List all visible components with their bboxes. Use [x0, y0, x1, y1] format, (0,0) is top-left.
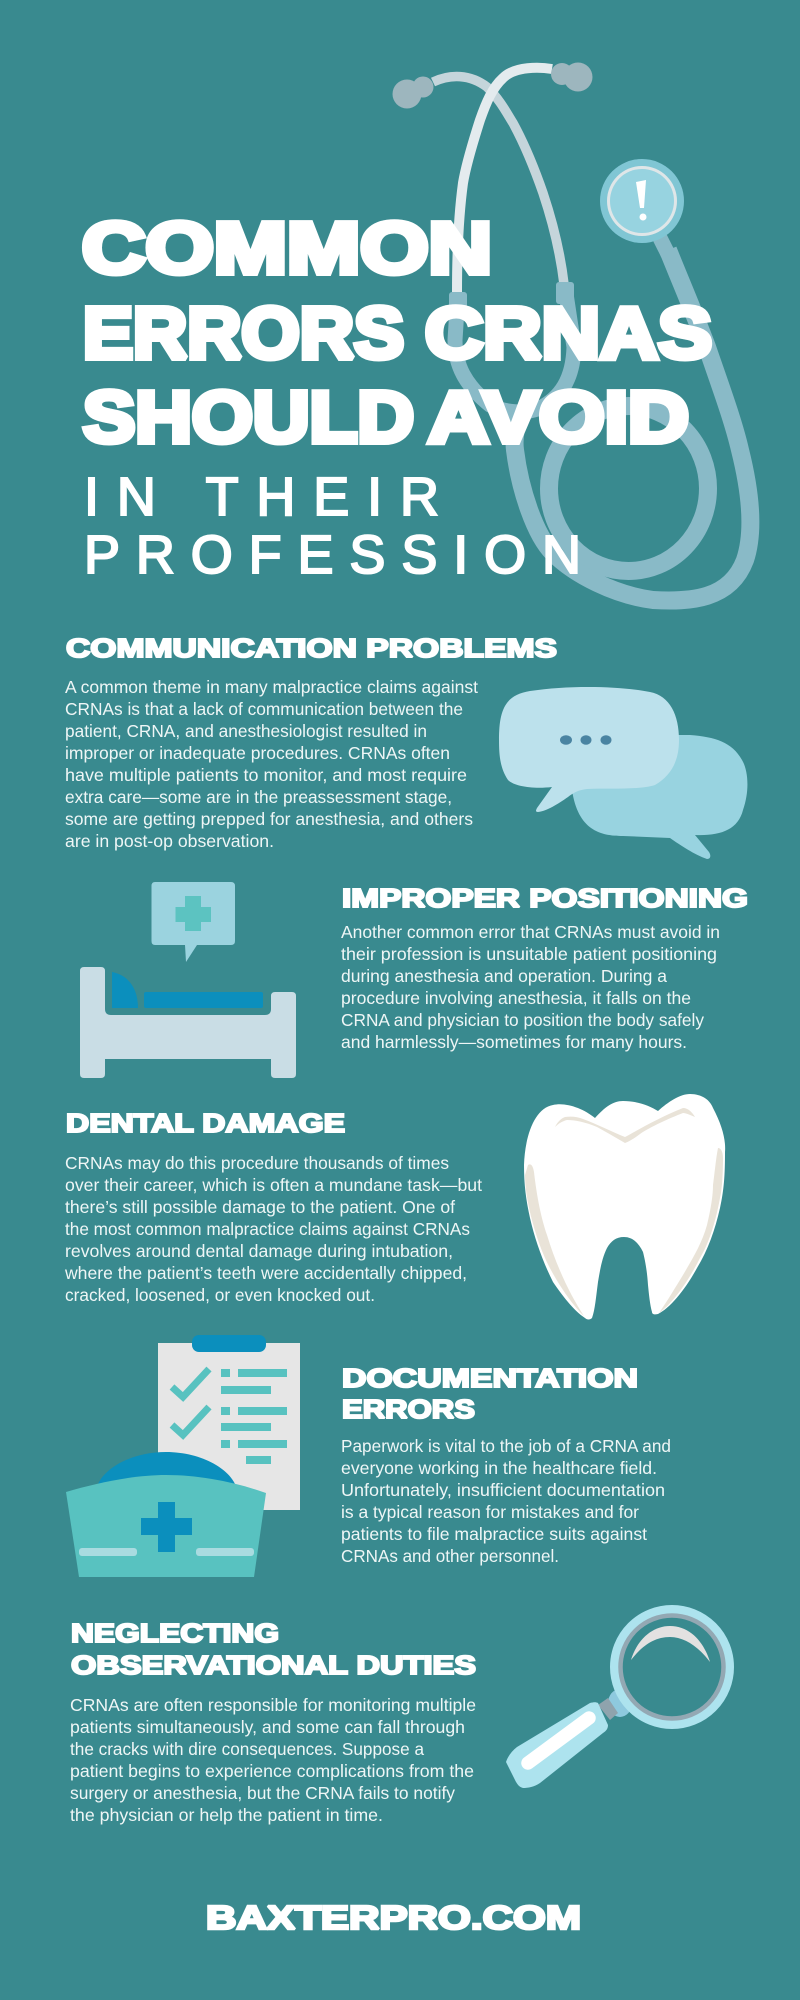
text block: improper or inadequate procedures. CRNAs often [65, 743, 450, 763]
text block: over their career, which is often a mundane task—but [65, 1175, 482, 1195]
title: COMMON [82, 209, 492, 289]
title: AVOID [428, 378, 689, 458]
text block: is a typical reason for mistakes and for [341, 1502, 639, 1522]
heading: DOCUMENTATION [342, 1363, 638, 1393]
text block: cracked, loosened, or even knocked out. [65, 1285, 375, 1305]
heading: NEGLECTING [71, 1618, 279, 1648]
text block: CRNAs are often responsible for monitoring multiple [70, 1695, 476, 1715]
text block: are in post-op observation. [65, 831, 274, 851]
text block: A common theme in many malpractice claims against [65, 677, 478, 697]
panel: neglecting observational duties [70, 1610, 730, 1825]
panel: documentation errors [66, 1335, 671, 1577]
title: SHOULD [83, 378, 414, 458]
subtitle [84, 467, 581, 585]
icon: hospital bed with medical speech bubble [80, 882, 296, 1078]
icon: magnifying glass [506, 1610, 730, 1788]
heading: IMPROPER POSITIONING [342, 883, 748, 913]
text block: everyone working in the healthcare field. [341, 1458, 657, 1478]
text block: CRNA and physician to position the body safely [341, 1010, 704, 1030]
text block: patients to file malpractice suits against [341, 1524, 647, 1544]
panel: improper positioning [80, 882, 748, 1078]
text block: the most common malpractice claims against CRNAs [65, 1219, 470, 1239]
title: CRNAS [425, 294, 712, 374]
text block [64, 1153, 482, 1305]
icon: stethoscope [392, 62, 750, 601]
panel: dental damage [64, 1094, 725, 1320]
text block: patient, CRNA, and anesthesiologist resulted in [65, 721, 427, 741]
title: ERRORS [83, 294, 404, 374]
text block: surgery or anesthesia, but the CRNA fails to notify [70, 1783, 455, 1803]
text block: revolves around dental damage during intubation, [65, 1241, 453, 1261]
heading [342, 1363, 638, 1424]
heading [71, 1618, 476, 1680]
footer: website: BAXTERPRO.COM [206, 1899, 581, 1936]
text block [341, 922, 720, 1052]
text block: Paperwork is vital to the job of a CRNA and [341, 1436, 671, 1456]
text block: extra care—some are in the preassessment stage, [65, 787, 452, 807]
icon: clipboard and nurse hat [66, 1335, 300, 1577]
icon: tooth [524, 1094, 725, 1320]
text block: some are getting prepped for anesthesia, and others [65, 809, 473, 829]
text block: during anesthesia and operation. During a [341, 966, 667, 986]
text block: CRNAs may do this procedure thousands of times [65, 1153, 449, 1173]
heading: ERRORS [342, 1394, 475, 1424]
text block [65, 677, 478, 851]
text block: procedure involving anesthesia, it falls on the [341, 988, 691, 1008]
title [82, 209, 712, 458]
text block: patients simultaneously, and some can fall through [70, 1717, 465, 1737]
text block: CRNAs is that a lack of communication between the [65, 699, 463, 719]
icon: speech bubbles [499, 687, 747, 859]
heading: DENTAL DAMAGE [66, 1108, 345, 1138]
text block: the physician or help the patient in time. [70, 1805, 383, 1825]
text block [341, 1436, 671, 1566]
text block: the cracks with dire consequences. Suppose a [70, 1739, 424, 1759]
text block: CRNAs and other personnel. [341, 1546, 559, 1566]
text block: there’s still possible damage to the patient. One of [65, 1197, 455, 1217]
heading: OBSERVATIONAL DUTIES [71, 1650, 476, 1680]
subtitle: PROFESSION [84, 525, 581, 585]
text block: their profession is unsuitable patient positioning [341, 944, 717, 964]
text block: Unfortunately, insufficient documentation [341, 1480, 665, 1500]
heading: COMMUNICATION PROBLEMS [66, 633, 557, 663]
panel: communication problems [65, 633, 747, 859]
subtitle: IN THEIR [84, 467, 439, 527]
text block: where the patient’s teeth were accidentally chipped, [64, 1263, 467, 1283]
text block: have multiple patients to monitor, and most require [65, 765, 467, 785]
text block: Another common error that CRNAs must avoid in [341, 922, 720, 942]
text block [70, 1695, 476, 1825]
text block: and harmlessly—sometimes for many hours. [341, 1032, 687, 1052]
text block: patient begins to experience complications from the [70, 1761, 474, 1781]
